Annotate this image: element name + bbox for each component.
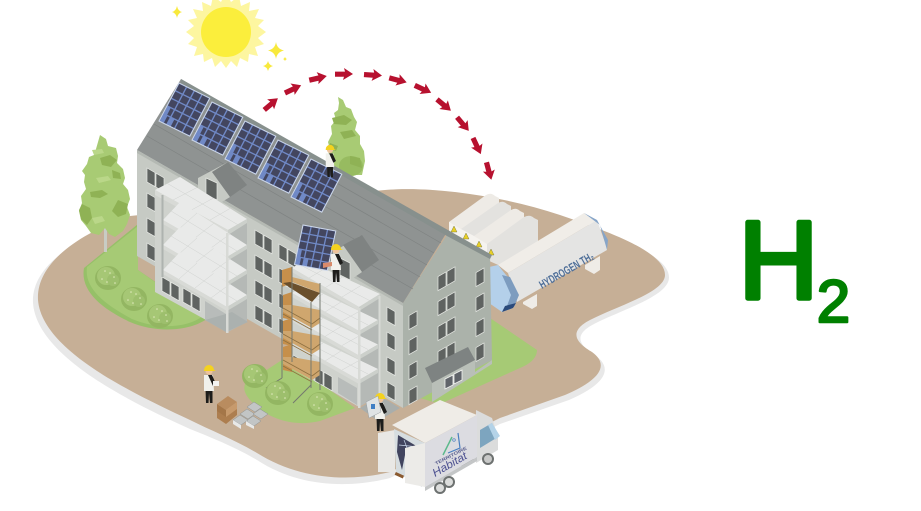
- worker carrying equipment: [366, 393, 387, 431]
- sun: [186, 0, 266, 68]
- porch on the gable wall: [425, 347, 492, 402]
- right gable wall: [403, 235, 492, 408]
- cardboard boxes: [217, 396, 237, 424]
- sparkles: [172, 6, 287, 71]
- tank label: HYDROGEN TH₂: [538, 251, 596, 292]
- worker holding panel: [323, 244, 343, 282]
- ground shadow: [33, 189, 669, 484]
- right balconies: [292, 260, 380, 408]
- held solar panel: [294, 225, 336, 270]
- bushes: [95, 266, 333, 416]
- hydrogen tank: [489, 213, 608, 312]
- truck cab: [460, 410, 500, 467]
- delivery truck: [378, 400, 500, 494]
- energy storage tanks: [449, 194, 538, 268]
- truck logo: [430, 433, 470, 480]
- right lawn: [420, 318, 537, 404]
- roof: [137, 79, 492, 306]
- truck logo: TERRITOIRE: [434, 446, 468, 466]
- left tree: [79, 135, 130, 252]
- energy flow arrows: [260, 68, 497, 181]
- right entrance pad: [360, 396, 400, 421]
- H2 formula: H: [739, 200, 818, 322]
- front wall: [137, 150, 403, 408]
- gable windows: [409, 267, 484, 405]
- stacked grey batteries: [233, 402, 268, 429]
- left dormer: [198, 162, 247, 205]
- scaffolding: [266, 267, 320, 403]
- worker with a checklist: [204, 365, 219, 403]
- building: [137, 79, 492, 421]
- H2 formula: 2: [817, 268, 850, 335]
- left balconies: [155, 177, 248, 333]
- worker on the roof: [326, 145, 336, 177]
- tree behind the building: [327, 97, 365, 176]
- rooftop solar panels: [159, 83, 342, 212]
- left lawn: [83, 224, 208, 329]
- front lawn: [244, 358, 355, 423]
- right dormer: [333, 235, 379, 281]
- ground: [38, 189, 665, 478]
- front windows: [147, 168, 395, 401]
- truck logo: Habitat: [430, 450, 470, 480]
- H2 formula: [739, 200, 850, 335]
